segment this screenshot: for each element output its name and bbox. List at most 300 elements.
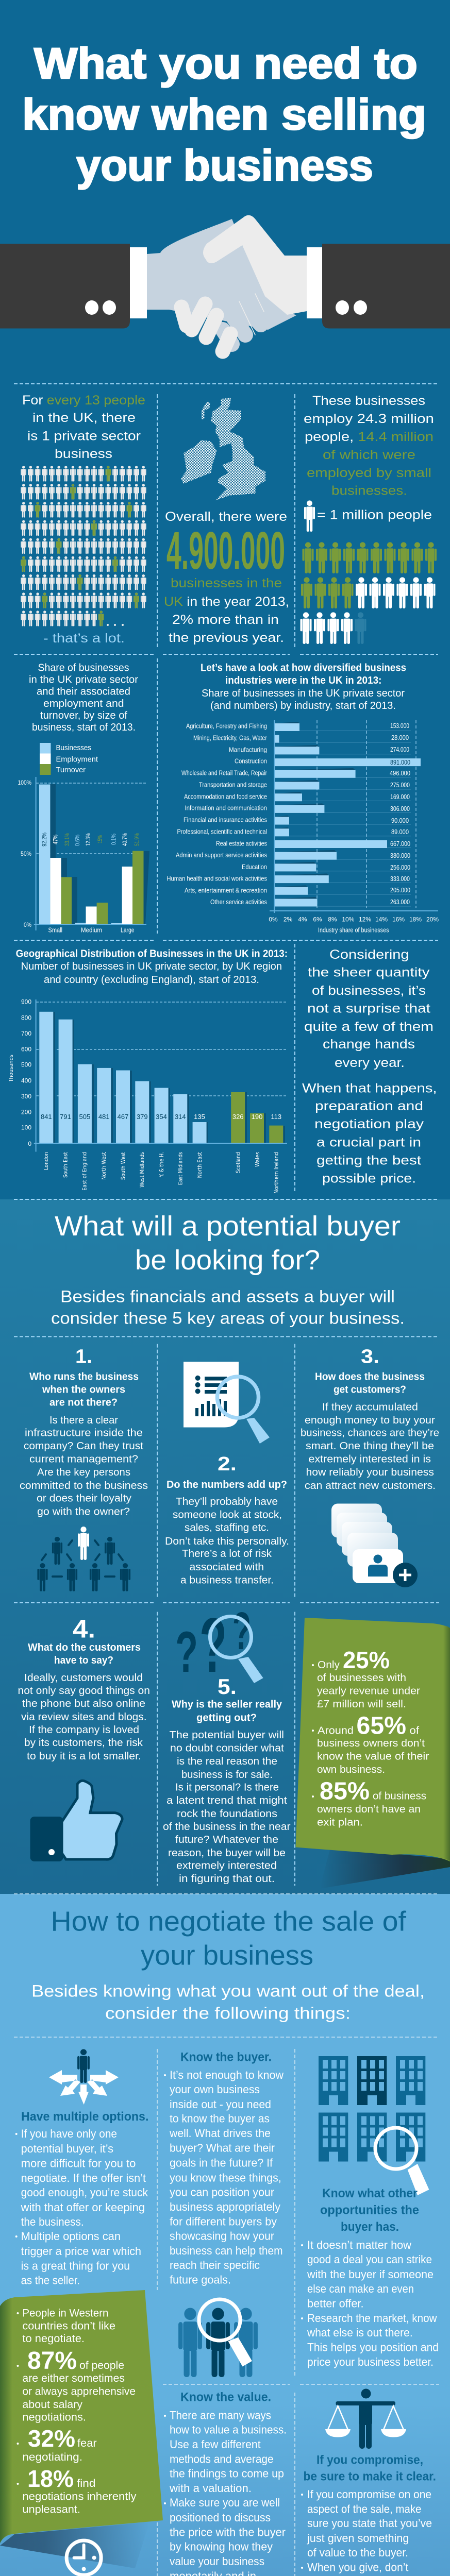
panel: employment [300,394,437,644]
bar chart: industry share: Arts, entertainment & recreation [185,887,267,894]
bar chart: regions: North East [196,1151,203,1178]
body text: business is for sale. [181,1769,273,1781]
bullet list: aspect of the sale, make [307,2502,421,2515]
bar chart: industry share: 10% [342,916,355,923]
heading: if you compromise [303,2453,436,2483]
bullet list: positioned to discuss [170,2511,271,2524]
stat: 87%: about salary [22,2399,83,2411]
bar chart: regions: 0 [28,1140,31,1147]
bullet list: It’s not enough to know [170,2069,284,2081]
heading: industries: industries were in the UK in 2013: [225,675,381,686]
bar chart: size: 0.1% [111,834,118,845]
text: every 13 people: in the UK, there [32,411,136,425]
body text: can attract new customers. [305,1480,436,1492]
legend: Businesses [56,743,91,752]
callout: green sale statistics [296,1618,450,1889]
stat: 65%: 65% [357,1713,406,1739]
bar chart: regions: 326 [232,1113,244,1121]
panel: key area 1 [20,1346,148,1591]
bar chart: size: Large [121,926,134,934]
subheading: five key areas: Besides financials and assets a buyer will [60,1287,395,1306]
bullet list: just given something [307,2532,409,2545]
stat: 65% [312,1713,429,1775]
body text: If the company is loved [29,1724,139,1736]
bar chart: industry share: 169.000 [390,793,410,801]
bar chart: industry share: 275.000 [390,781,410,789]
bar chart: industry share: Professional, scientific and technical [177,828,267,836]
body text: infrastructure inside the [25,1428,143,1439]
subheading: consider the following: Besides knowing what you want out of the deal, [31,1981,425,2000]
heading: how does the business get customers [315,1371,425,1395]
bar chart: industry share: 263.000 [390,898,410,906]
text: overall there were: Overall, there were [165,510,287,524]
bullet list: It doesn’t matter how [307,2239,411,2251]
bar chart: regions: 700 [21,1030,31,1037]
text: western countries: countries don’t like [22,2320,115,2332]
title [22,39,426,190]
bar chart: size: 40.7% [122,833,128,846]
panel: every 13 people [21,393,146,646]
body text: extremely interested [176,1860,277,1871]
panel: key area 2 [165,1362,289,1586]
bar chart: size: 0.6% [75,835,81,846]
body text: go with the owner? [37,1506,130,1517]
bar chart: regions: Scotland [235,1152,242,1173]
heading: know what other opportunities: buyer has. [341,2220,399,2234]
bar chart: industry share: Other service activities [210,898,267,906]
bar chart: industry share: 496.000 [390,769,410,777]
heading: know what other opportunities: opportunities the [320,2204,419,2217]
bar chart: regions: 841 [41,1113,52,1121]
bar chart: industry share: 333.000 [390,875,410,883]
icon: question marks and magnifier: ? [175,1620,198,1684]
body text: committed to the business [20,1480,148,1492]
bullet list: potential buyer, it’s [21,2142,113,2155]
bar chart: industry share: Mining, Electricity, Gas, Water [193,734,268,742]
bullet list [15,2127,148,2286]
bar chart: industry share: Agriculture, Forestry and Fishing [186,722,267,730]
number 2: 2. [218,1453,237,1475]
body text: or does their loyalty [37,1493,131,1504]
bar chart: industry share: 2% [284,916,293,923]
body text: of the business in the near [163,1821,291,1833]
text block: considering the sheer quantity: a crucial part in [316,1136,421,1150]
icon grid: people [21,466,146,626]
bar chart: regions: 135 [194,1113,205,1121]
bar chart: regions: 100 [21,1124,31,1131]
stat: 25%: of businesses with [317,1672,406,1684]
heading: do the numbers add up: Do the numbers add up? [166,1479,287,1490]
bullet list: well. What drives the [169,2127,271,2140]
bullet list [164,2069,284,2286]
heading: what do the customers have to say: What do the customers [28,1642,141,1653]
bullet list: future goals. [170,2274,231,2286]
heading: industries: Let’s have a look at how diversified business [201,663,406,674]
bar chart: size: 92.2% [42,833,48,846]
bar chart: industry share: 18% [409,916,422,923]
bar chart: industry share: Admin and support service activities [176,851,267,859]
text: western countries: to negotiate. [22,2333,85,2345]
bullet list: for different buyers by [170,2215,277,2228]
subheading: consider the following: consider the following things: [105,2004,351,2022]
bar chart: industry share: 256.000 [390,863,410,871]
text block: considering the sheer quantity: negotiation play [314,1117,424,1131]
number 5: 5. [218,1674,237,1699]
bullet list: to know the buyer as [170,2112,270,2125]
bullet list: of value to the buyer. [307,2546,408,2559]
icon: clock [66,2540,101,2575]
bullet list: with the buyer if someone [307,2268,434,2281]
heading: how to negotiate the sale: How to negotiate the sale of [51,1906,407,1937]
bullet list: else can make an even [307,2282,414,2295]
text: businesses in the UK: UK in the year 2013, [164,595,289,609]
bar chart: regions: East Midlands [177,1152,184,1185]
bullet list: better offer. [307,2297,364,2310]
bar chart: industry share: 306.000 [390,805,410,812]
panel: geographical distribution [8,948,288,1194]
body text: Don’t take this personally. [165,1536,289,1547]
bullet list: negotiate. If the offer isn’t [21,2172,146,2184]
bar chart: size: 51.9% [135,833,141,846]
bullet list: Use a few different [170,2438,261,2451]
body text: to buy it is a lot smaller. [27,1751,141,1762]
bullet list: This helps you position and [307,2341,439,2354]
heading: know the buyer: Know the buyer. [180,2050,272,2064]
bar chart: size: 12.3% [86,833,92,846]
title: What you need to [34,39,418,88]
heading: share by size: business, start of 2013. [32,722,136,733]
bullet list: with a valuation. [169,2482,252,2495]
bullet list [301,2239,439,2368]
body text: They’ll probably have [176,1496,278,1507]
bullet list: Multiple options can [21,2230,121,2243]
heading: if you compromise: If you compromise, [316,2453,423,2467]
dashed dividers: negotiation section [14,1894,439,2576]
subheading: consider the following [31,1981,425,2022]
panel: key area 4 [18,1615,150,1861]
text: western countries [16,2308,115,2345]
body text: no doubt consider what [170,1742,284,1754]
bullet list: by knowing how they [170,2540,273,2553]
dashed dividers: buyer section [14,1336,439,1886]
bar chart: industry share: Wholesale and Retail Trade, Repair [181,769,268,777]
stat: 65%: of [409,1725,419,1736]
body text [163,1730,291,1885]
body text: is the real reason the [177,1756,277,1767]
stat: 65%: own business. [317,1764,385,1775]
bar chart: regions: Northern Ireland [273,1152,280,1194]
body text: future? Whatever the [175,1834,278,1845]
heading: if you compromise: be sure to make it clear. [303,2470,436,2483]
stat: 18% [16,2465,137,2516]
body text: Is it personal? Is there [175,1782,279,1793]
bar chart: size: 0% [24,921,31,928]
bullet list: Research the market, know [307,2312,437,2325]
bullet list: If you have only one [21,2127,117,2140]
bar chart: industry share: 274.000 [390,745,409,753]
stat: 65%: business owners don’t [317,1738,425,1749]
text block: considering the sheer quantity: not a surprise that [307,1002,430,1016]
bar chart: regions: 300 [21,1093,31,1100]
bar chart: regions: 400 [21,1077,31,1084]
title: know when selling [22,90,426,139]
heading: who runs the business [29,1371,139,1408]
text block: considering the sheer quantity [302,947,437,1186]
number 1: 1. [75,1346,92,1368]
text: employment: businesses. [331,483,407,498]
icon: customer cards and plus [331,1503,418,1587]
heading: what will a potential buyer be looking for: What will a potential buyer [55,1211,401,1242]
stat: 87%: are either sometimes [22,2372,125,2384]
body text: a latent trend that might [166,1795,287,1806]
dashed dividers: statistics section [14,384,438,1199]
panel: key area 5 [163,1601,291,1885]
bar chart: regions: 200 [21,1109,31,1116]
heading: what will a potential buyer be looking for [55,1211,401,1276]
body text: sales, staffing etc. [185,1522,269,1534]
heading: share by size: turnover, by size of [40,710,127,721]
bar chart: regions [8,998,287,1194]
bar chart: industry share: 28.000 [391,734,409,741]
heading: why is the seller really getting out: Why is the seller really [172,1699,282,1710]
bar chart: regions: 505 [79,1113,90,1121]
bar chart: regions: 314 [175,1113,186,1121]
bullet list: showcasing how your [170,2229,274,2242]
body text [301,1401,439,1492]
text block: considering the sheer quantity: the sheer quantity [308,965,430,980]
bullet list: more difficult for you to [21,2157,136,2170]
heading: how to negotiate the sale [51,1906,407,1971]
bar chart: regions: Wales [254,1152,261,1167]
body text: rock the foundations [177,1808,277,1820]
bullet list: good a deal you can strike [307,2253,432,2266]
bar chart: regions: North West [101,1151,107,1180]
stat: 65%: know the value of their [317,1751,429,1762]
bullet list: business appropriately [170,2200,280,2213]
panel: take your time [15,2540,139,2576]
text block: considering the sheer quantity: every year. [335,1056,405,1070]
bar chart: industry share: Transportation and storage [199,781,267,789]
bullet list: inside out - you need [170,2098,271,2111]
heading: know what other opportunities [320,2187,419,2234]
bullet list [164,2409,287,2576]
text: employment: of which were [323,448,415,462]
bullet list [301,2488,437,2576]
stat: 85%: 85% [320,1777,370,1805]
heading: what will a potential buyer be looking for: be looking for? [135,1245,320,1276]
bar chart: industry share: 6% [313,916,322,923]
icon: person as scales [325,2388,406,2449]
stat: 25%: 25% [343,1647,390,1673]
heading: share by size: employment and [43,698,124,709]
heading: geography: Number of businesses in UK private sector, by UK region [21,961,282,972]
icon: question marks and magnifier: ? [199,1602,227,1688]
bullet list: Make sure you are well [170,2496,280,2509]
bullet list: as the seller. [21,2274,80,2286]
heading: what do the customers have to say [28,1642,141,1666]
bullet list: trigger a price war which [21,2245,141,2258]
text: businesses in the UK: 2% more than in [172,613,279,627]
body text: The potential buyer will [169,1730,284,1741]
stat: 85%: exit plan. [317,1817,363,1828]
text block: considering the sheer quantity: Considering [329,947,409,962]
stat: 87%: negotiations. [22,2412,86,2424]
icon grid: employed people [300,542,437,644]
text block: considering the sheer quantity: quite a few of them [304,1020,434,1034]
bullet list: price your business better. [307,2355,434,2368]
bar chart: regions: 481 [98,1113,110,1121]
bar chart: industry share: 20% [426,916,439,923]
bar chart: industry share: Manufacturing [229,746,267,753]
bar chart: regions: 500 [21,1061,31,1069]
stat: 18%: find [77,2478,95,2489]
bar chart: regions: 379 [137,1113,148,1121]
bullet list: If you compromise on one [307,2488,431,2501]
body text: by its customers, the risk [24,1737,143,1749]
body text: If they accumulated [322,1401,418,1413]
bar chart: industry share: 89.000 [391,828,409,836]
text: every 13 people: business [55,447,112,461]
body text: Are the key persons [37,1467,130,1478]
panel: have multiple options [15,2049,148,2286]
bar chart: industry share: Human health and social work activities [167,875,267,883]
heading: geography: and country (excluding England), start of 2013. [44,974,259,986]
bar chart: regions: South West [120,1151,126,1180]
bar chart: regions: 600 [21,1046,31,1053]
panel: overall businesses [164,398,289,645]
bar chart: size: 100% [18,779,31,786]
text: every 13 people: is 1 private sector [27,429,141,443]
heading: industries: (and numbers) by industry, start of 2013. [210,700,396,711]
stat: 25%: £7 million will sell. [317,1699,406,1710]
body text: Is there a clear [49,1415,118,1426]
bullet list: sure you state that you’ve [307,2517,432,2530]
body text: not only say good things on [18,1685,150,1697]
bar chart: regions: 354 [156,1113,167,1121]
heading: industries [201,663,406,711]
bar chart: industry share: 891.000 [390,758,410,766]
map: UK and Ireland [181,398,265,500]
panel: know other opportunities [301,2056,439,2368]
body text: reason, the buyer will be [168,1848,286,1859]
heading: what do the customers have to say: have to say? [54,1655,113,1666]
bar chart: industry share: Financial and insurance activities [184,816,267,824]
icon: people and magnifier [178,2299,258,2377]
bullet list: what else is out there. [307,2326,413,2339]
stat: 87% [16,2347,136,2424]
stat: 87%: or always apprehensive [22,2385,136,2398]
illustration: handshake [0,215,450,351]
bar chart: size: 50% [21,850,31,857]
bullet list: with that offer or keeping [21,2201,145,2214]
bar chart: industry share: 667.000 [390,840,410,848]
bar chart: industry share: 8% [328,916,337,923]
stat: 85%: owners don’t have an [317,1804,421,1815]
bar chart: regions: 791 [60,1113,71,1121]
text: that's a lot: - that’s a lot. [43,631,125,646]
stat: 32%: 32% [28,2425,75,2452]
bar chart: regions: Y. & the H. [158,1152,165,1178]
body text: There’s a lot of risk [182,1548,272,1560]
text block: considering the sheer quantity: possible price. [322,1172,416,1186]
bullet list: you can position your [170,2185,274,2198]
text: employment: employ 24.3 million [304,412,434,426]
heading: who runs the business: Who runs the business [29,1371,139,1383]
bar chart: industry share: 4% [298,916,307,923]
text: western countries: People in Western [22,2308,108,2319]
bar chart: regions: South East [62,1151,69,1178]
icon: question marks and magnifier: ? [232,1601,251,1660]
text: businesses in the UK: the previous year. [169,631,284,645]
stat: 87%: of people [79,2360,124,2371]
bullet list: When you give, don’t [307,2561,408,2574]
bar chart: industry share: 16% [392,916,405,923]
stat: 4.900.000: 4.900.000 [166,521,285,580]
body text: company? Can they trust [24,1440,143,1452]
body text: associated with [190,1562,264,1573]
text: employment: people, 14.4 million [305,430,434,444]
callout: green negotiation statistics [0,2290,163,2568]
bar chart: regions: Thousands [8,1055,14,1082]
icon: organisation people [37,1527,130,1591]
bar chart: industry share: 205.000 [390,886,410,894]
text block: considering the sheer quantity: change hands [323,1037,415,1052]
text: employment: employed by small [307,466,431,480]
stat: 85% [312,1777,426,1828]
subheading: five key areas [51,1287,405,1327]
heading: geography: Geographical Distribution of Businesses in the UK in 2013: [16,948,288,959]
body text [165,1496,289,1586]
legend [40,743,98,775]
panel: know the value [164,2390,287,2576]
bar chart: industry share: Information and communication [185,804,267,812]
bar chart: industry share: 0% [269,916,278,923]
bar chart: size: 33.1% [64,833,71,846]
bullet list: value your business [170,2555,264,2568]
stat: 18%: unpleasant. [22,2504,80,2516]
bar chart: industry share: 153.000 [390,722,409,730]
bar chart: regions: 113 [271,1113,281,1121]
bullet list: business can help them [170,2244,282,2257]
bar chart: regions: 800 [21,1014,31,1021]
body text: in figuring that out. [179,1873,275,1885]
legend: 1 million people: = 1 million people [317,508,432,522]
panel: know the buyer [164,2050,284,2377]
heading: know what other opportunities: Know what other [322,2187,418,2200]
bullet list: buyer? What are their [170,2142,275,2155]
icon: question marks and magnifier [175,1601,263,1688]
bar chart: regions: 900 [21,998,31,1006]
bullet list: the business. [21,2215,84,2228]
bar chart: industry share: Accommodation and food service [184,792,267,801]
body text: business, chances are they’re [301,1428,439,1439]
bullet list: is a great thing for you [21,2260,130,2272]
heading: how does the business get customers: How does the business [315,1371,425,1383]
panel: share by size of business [18,663,149,934]
stat: 87%: 87% [27,2347,77,2375]
heading: who runs the business: are not there? [49,1397,118,1408]
body text: how reliably your business [306,1467,434,1478]
heading: share by size: and their associated [37,686,130,698]
text: businesses in the UK [164,576,289,645]
body text: a business transfer. [180,1574,274,1586]
bar chart: regions: West Midlands [139,1152,145,1188]
bar chart: regions: 190 [252,1113,262,1121]
bullet list: your own business [170,2083,260,2096]
bar chart: industry share: 14% [375,916,388,923]
bar chart: industry share: Education [242,863,267,871]
heading: geography [16,948,288,986]
